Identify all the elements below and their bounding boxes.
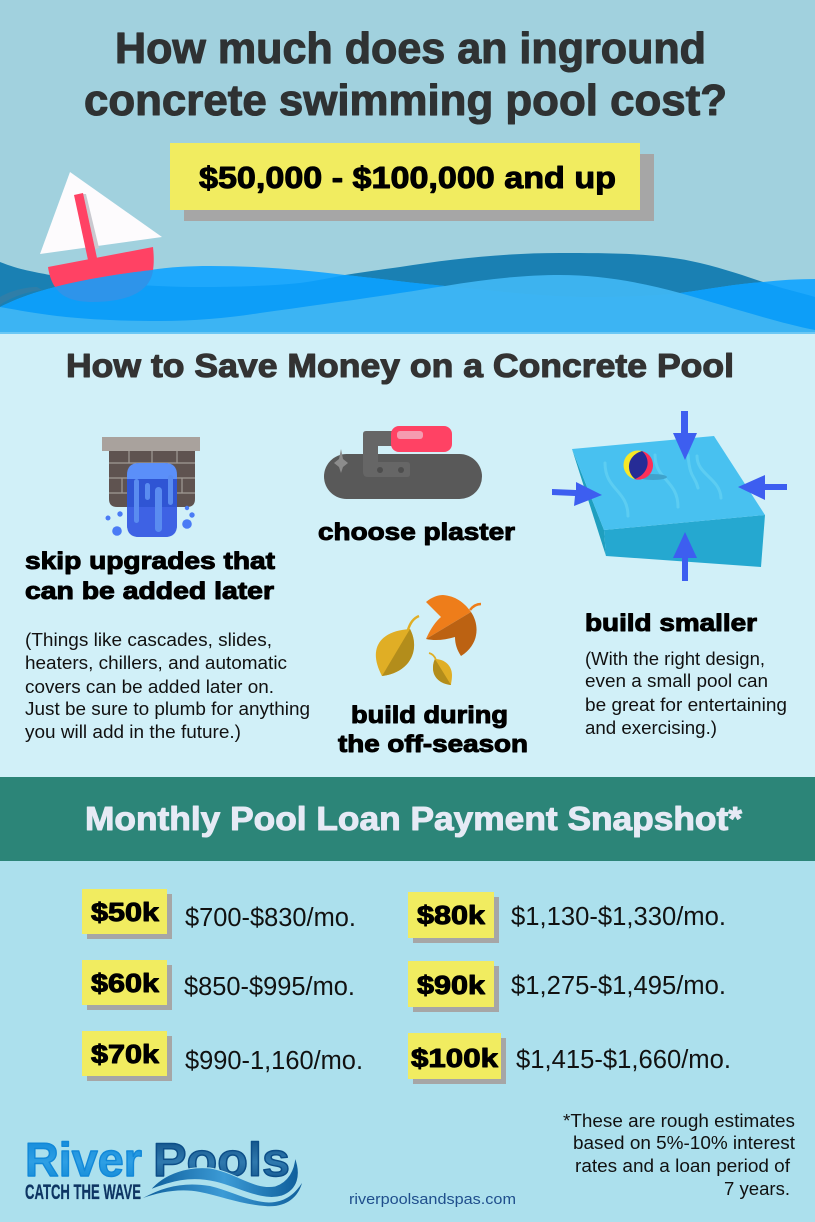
panel: header	[0, 0, 815, 334]
label: off-season	[338, 702, 528, 758]
label: skip upgrades: can be added later	[25, 578, 274, 605]
text: skip upgrades detail: (Things like cascades, slides,	[25, 630, 272, 650]
label: skip upgrades	[25, 548, 275, 605]
logo: River Pools: Pools	[153, 1133, 290, 1186]
website url: riverpoolsandspas.com	[349, 1191, 516, 1208]
row: $70k: $990-1,160/mo.	[185, 1047, 363, 1075]
waves	[0, 253, 815, 334]
icon: autumn leaves	[376, 595, 481, 685]
row: $60k: $850-$995/mo.	[184, 973, 355, 1001]
text: skip upgrades detail	[25, 630, 310, 742]
row: $100k: $1,415-$1,660/mo.	[516, 1046, 731, 1074]
panel: loan heading band	[0, 777, 815, 861]
row: $60k	[82, 960, 355, 1010]
icon: shrinking pool	[552, 411, 787, 581]
footnote: *These are rough estimates	[563, 1111, 795, 1131]
title: concrete swimming pool cost?	[84, 76, 727, 125]
text: build smaller detail: even a small pool can	[585, 671, 768, 691]
text: skip upgrades detail: Just be sure to plumb for anything	[25, 699, 310, 719]
title: How much does an inground	[115, 24, 706, 73]
row: $80k	[408, 892, 726, 943]
footnote	[563, 1111, 795, 1199]
logo: River Pools: CATCH THE WAVE	[25, 1181, 141, 1204]
row: $50k: $700-$830/mo.	[185, 904, 356, 932]
row: $70k	[82, 1031, 363, 1081]
row: $90k: $90k	[417, 970, 486, 1000]
label: choose plaster: choose plaster	[318, 519, 515, 546]
footnote: based on 5%-10% interest	[573, 1133, 795, 1153]
section heading: How to Save Money on a Concrete Pool	[66, 347, 734, 384]
label: build smaller: build smaller	[585, 610, 757, 637]
row: $50k: $50k	[91, 897, 160, 927]
icon: sailboat	[40, 172, 162, 302]
text: skip upgrades detail: covers can be added later on.	[25, 677, 274, 697]
row: $70k: $70k	[91, 1039, 160, 1069]
panel: loan heading band: Monthly Pool Loan Payment Snapshot*	[85, 800, 742, 837]
price range callout	[170, 143, 654, 221]
text: build smaller detail: and exercising.)	[585, 718, 717, 738]
label: off-season: the off-season	[338, 731, 528, 758]
label: skip upgrades: skip upgrades that	[25, 548, 275, 575]
footnote: rates and a loan period of	[575, 1156, 791, 1176]
text: build smaller detail: be great for entertaining	[585, 695, 787, 715]
icon: plaster trowel	[324, 426, 482, 499]
label: off-season: build during	[351, 702, 508, 729]
panel: loan payments	[0, 861, 815, 1222]
icon: waterfall from brick wall	[102, 437, 200, 537]
footnote: 7 years.	[724, 1179, 790, 1199]
logo: River Pools: River	[25, 1133, 142, 1186]
text: skip upgrades detail: heaters, chillers, and automatic	[25, 653, 287, 673]
text: skip upgrades detail: you will add in the future.)	[25, 722, 241, 742]
title	[84, 24, 727, 125]
row: $90k: $1,275-$1,495/mo.	[511, 972, 726, 1000]
row: $90k	[408, 961, 726, 1012]
row: $100k	[408, 1033, 731, 1084]
panel: how to save money	[0, 334, 815, 777]
logo: River Pools	[25, 1133, 302, 1206]
price range callout: $50,000 - $100,000 and up	[199, 160, 616, 195]
row: $80k: $80k	[417, 900, 486, 930]
row: $60k: $60k	[91, 968, 160, 998]
row: $80k: $1,130-$1,330/mo.	[511, 903, 726, 931]
text: build smaller detail	[585, 649, 787, 738]
row: $100k: $100k	[411, 1043, 499, 1073]
text: build smaller detail: (With the right design,	[585, 649, 765, 669]
row: $50k	[82, 889, 356, 939]
